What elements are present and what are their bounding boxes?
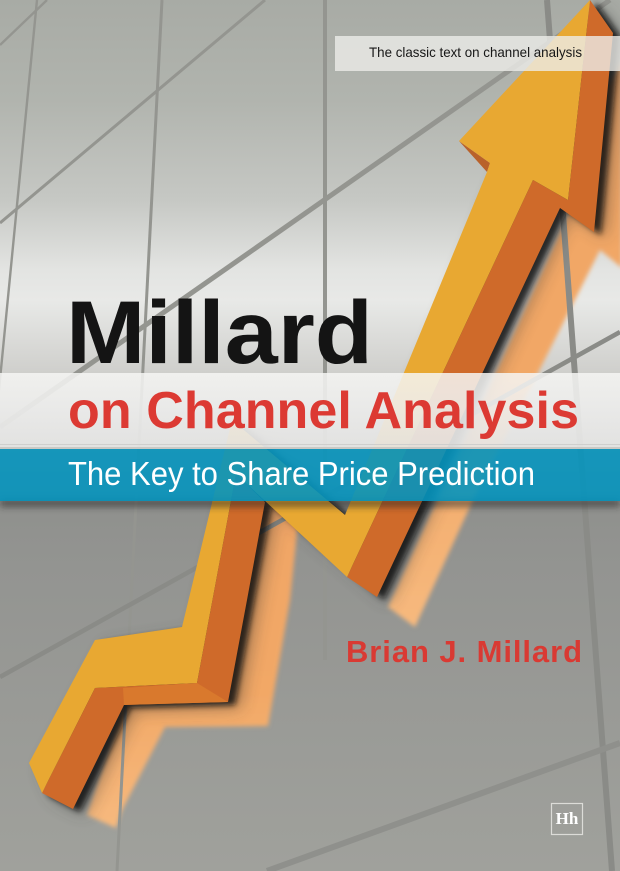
subtitle: The Key to Share Price Prediction xyxy=(68,455,535,492)
arrow orange side xyxy=(347,0,613,597)
title: on Channel Analysis: on Channel Analysis xyxy=(68,382,579,440)
arrow orange lower side xyxy=(42,474,265,809)
publisher logo: Hh xyxy=(556,809,579,828)
title: Millard: Millard xyxy=(66,282,373,382)
publisher logo xyxy=(552,804,582,834)
arrow head underside xyxy=(459,141,490,172)
author name: Brian J. Millard xyxy=(346,634,582,669)
arrow reflection xyxy=(87,60,620,828)
white title band xyxy=(0,373,620,449)
strapline text: The classic text on channel analysis xyxy=(369,44,582,60)
blue subtitle band xyxy=(0,449,620,501)
top strapline band xyxy=(335,36,620,71)
arrow lighter fold xyxy=(123,683,228,705)
blue band shadow xyxy=(0,499,620,507)
